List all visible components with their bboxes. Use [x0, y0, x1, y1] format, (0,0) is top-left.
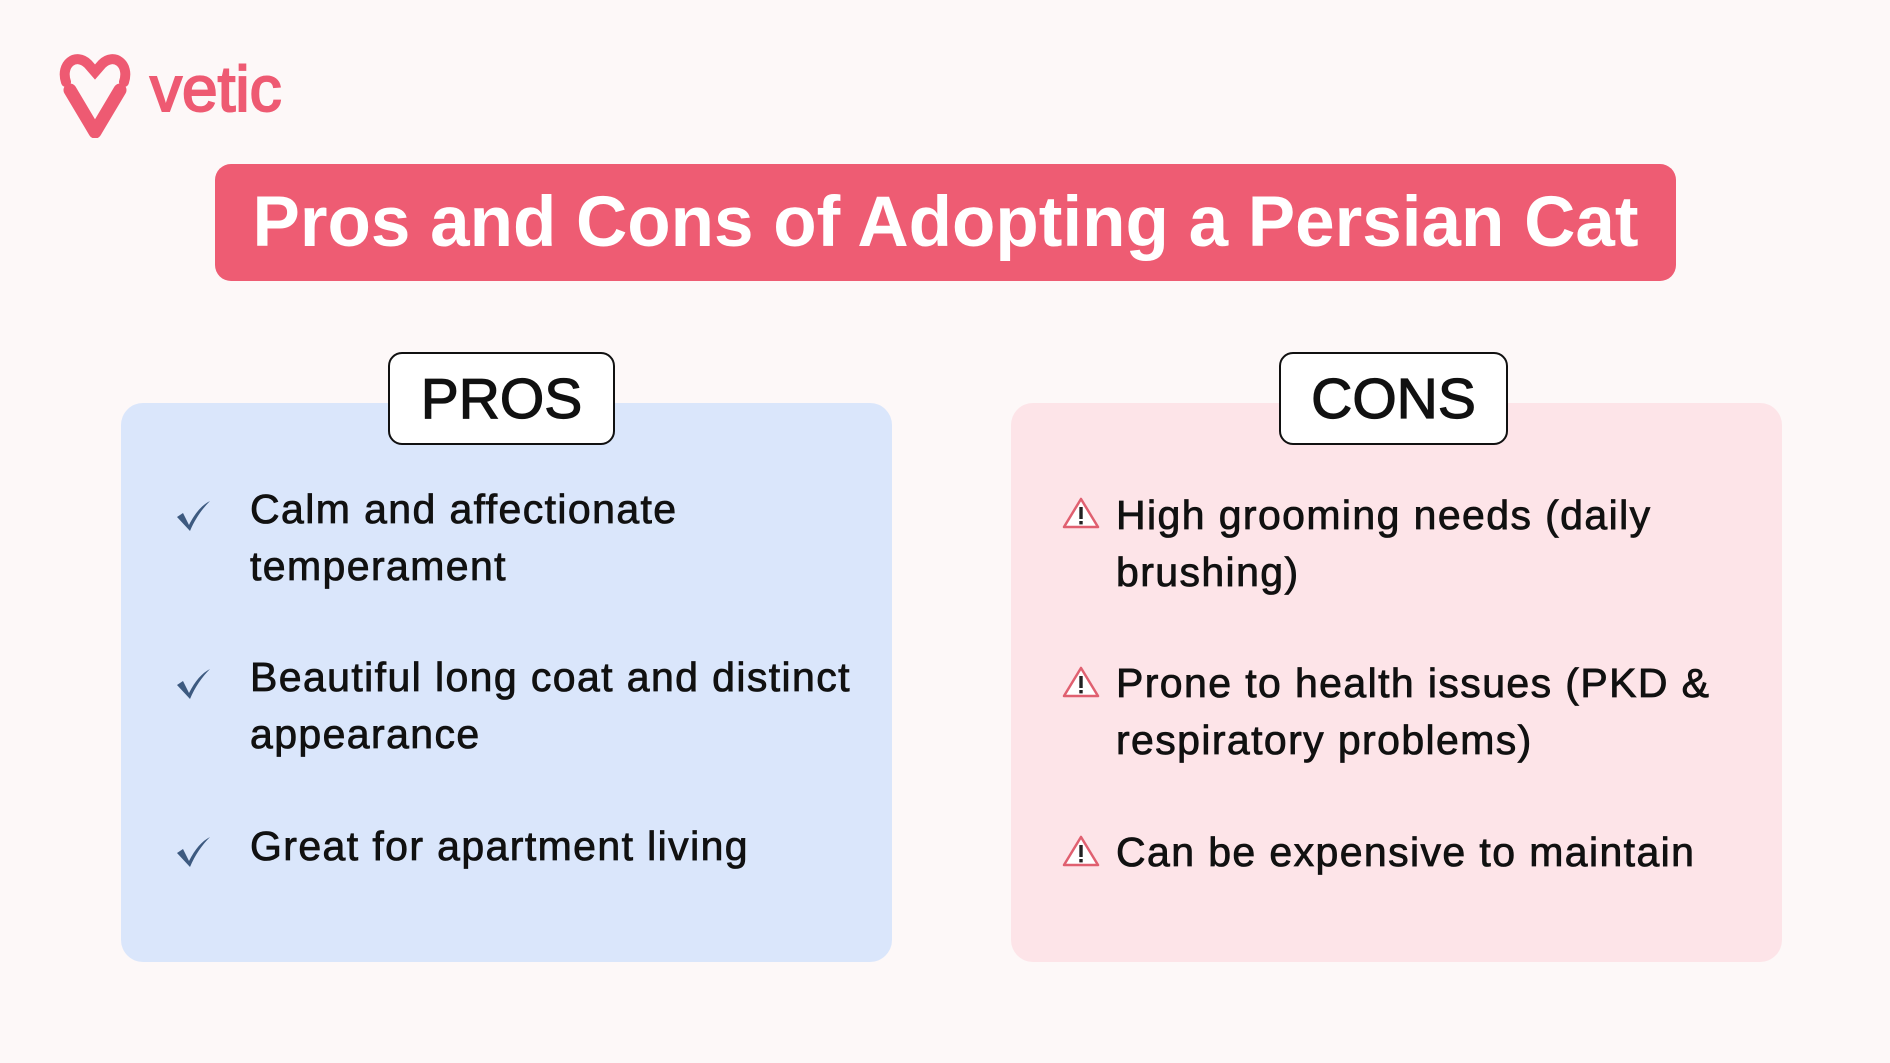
text: pro 3: Great for apartment living: [250, 823, 749, 869]
title banner: Pros and Cons of Adopting a Persian Cat: [253, 183, 1638, 262]
logo: [60, 53, 282, 138]
panel: cons: [1011, 403, 1782, 962]
title banner: [215, 164, 1676, 281]
pros list: [177, 486, 851, 869]
text: con 1: [1116, 492, 1652, 595]
heading: cons: CONS: [1311, 366, 1476, 430]
text: con 1: High grooming needs (daily: [1116, 492, 1652, 538]
icon: warning 3: [1062, 836, 1100, 866]
text: con 2: respiratory problems): [1116, 717, 1533, 763]
text: con 1: brushing): [1116, 549, 1300, 595]
icon: check 3: [177, 837, 210, 867]
brand name: vetic: [150, 53, 282, 125]
text: pro 1: Calm and affectionate: [250, 486, 678, 532]
text: con 3: Can be expensive to maintain: [1116, 829, 1695, 875]
text: pro 2: [250, 654, 851, 757]
icon: check 2: [177, 669, 210, 699]
icon: warning 1: [1062, 498, 1100, 528]
icon: warning 2: [1062, 666, 1100, 698]
cons list: [1062, 492, 1710, 875]
text: pro 1: [250, 486, 678, 589]
text: pro 2: Beautiful long coat and distinct: [250, 654, 851, 700]
icon: check 1: [177, 501, 210, 531]
text: pro 2: appearance: [250, 711, 481, 757]
text: con 2: Prone to health issues (PKD &: [1116, 660, 1710, 706]
text: con 2: [1116, 660, 1710, 763]
heading: pros: PROS: [421, 366, 582, 430]
heading: cons: [1279, 352, 1508, 445]
panel: pros: [121, 403, 892, 962]
icon: heart V: [60, 54, 130, 138]
text: pro 1: temperament: [250, 543, 507, 589]
heading: pros: [388, 352, 615, 445]
